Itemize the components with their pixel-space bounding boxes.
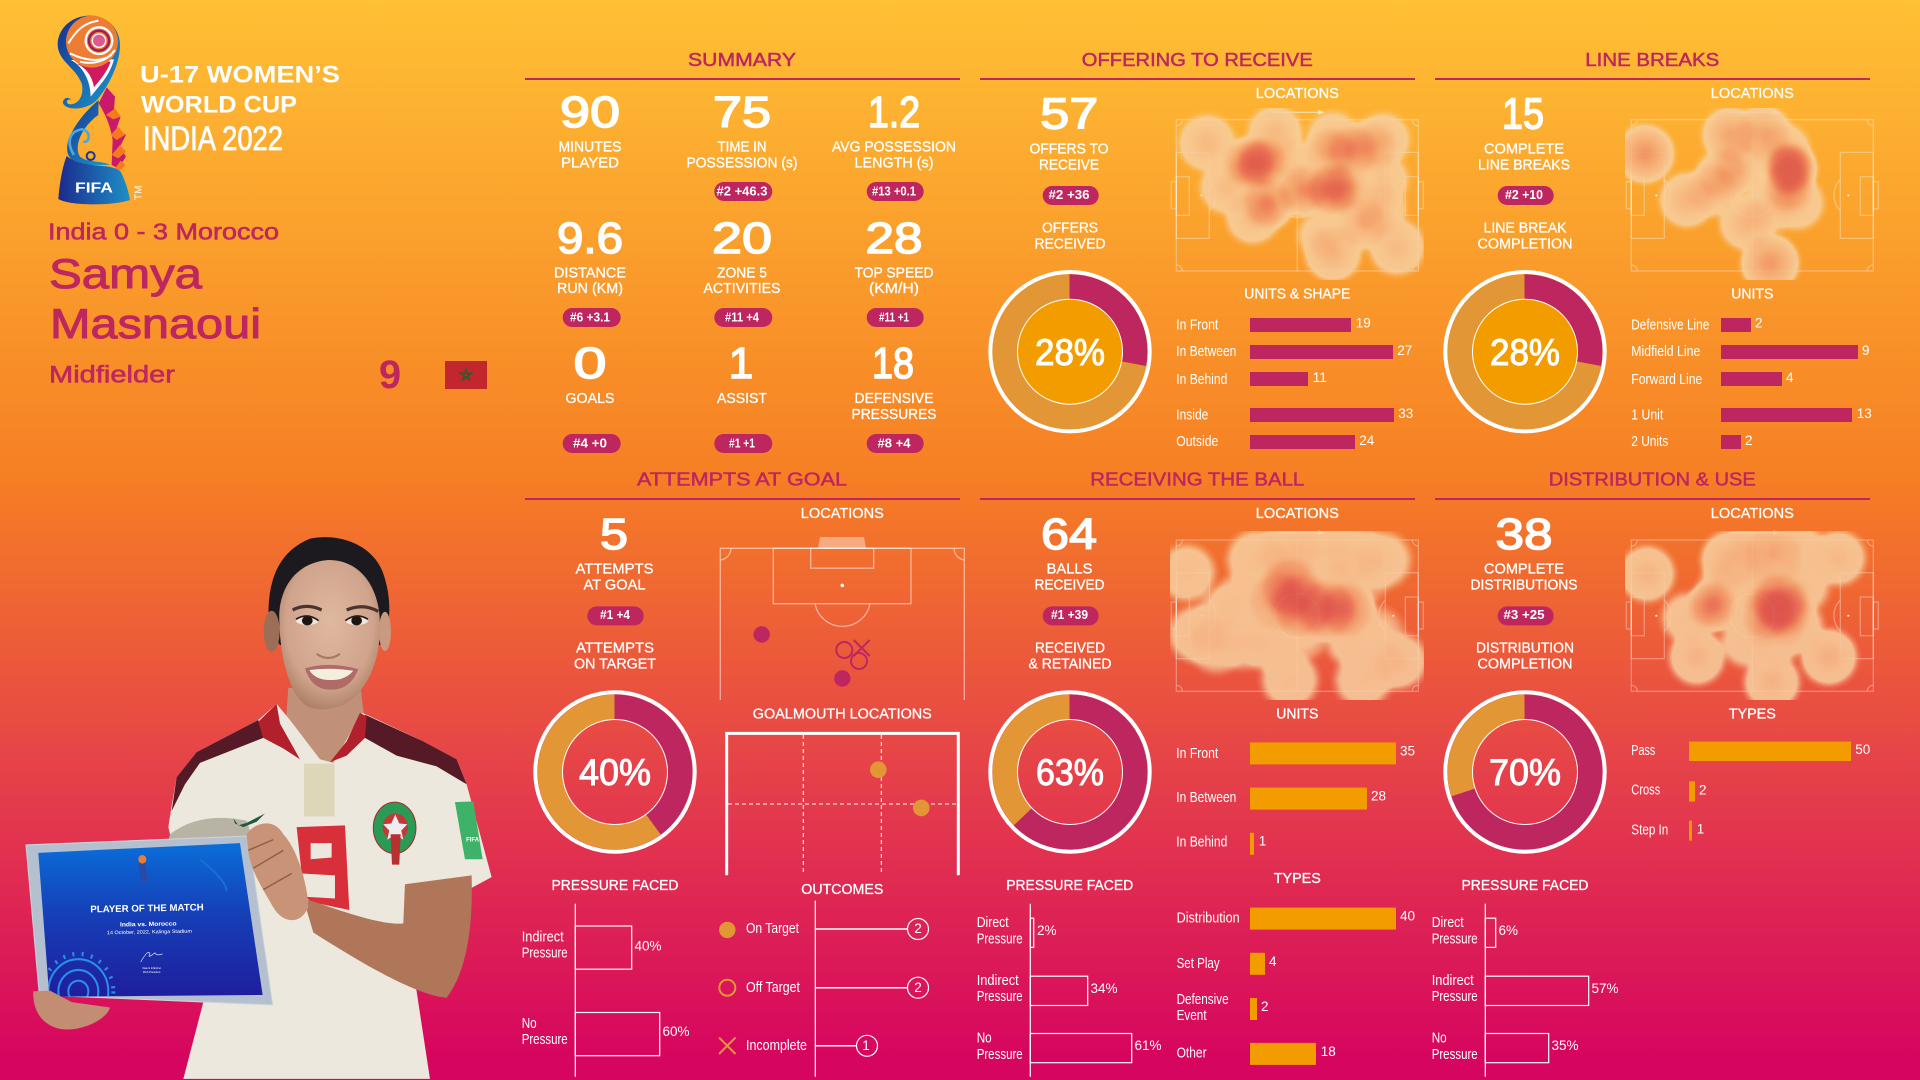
bar chart: distribution types: Pass [1631, 743, 1655, 759]
bar chart: units and shape: 11 [1313, 370, 1327, 385]
bar chart: receiving types: 2 [1261, 999, 1269, 1014]
bar chart: pressure faced: Pressure [1432, 1047, 1478, 1063]
stat: time in possession [686, 88, 798, 201]
tournament logo: FIFA [75, 180, 113, 196]
bar chart: units and shape: Inside [1176, 407, 1208, 423]
stat: assist [714, 339, 772, 453]
stat: balls received: RECEIVED [1034, 577, 1104, 593]
bar chart: pressure faced: 2% [1037, 923, 1057, 938]
bar chart: distribution types: 2 [1699, 782, 1707, 797]
heading: attempts at goal: ATTEMPTS AT GOAL [637, 469, 847, 490]
tournament title: WORLD CUP [141, 92, 297, 119]
stat: goals: 0 [574, 339, 606, 388]
bar chart: units: 2 Units [1631, 434, 1668, 450]
bar chart: units and shape: 19 [1356, 316, 1371, 331]
stat: balls received [1034, 510, 1104, 625]
donut chart: line break completion 28% [1445, 272, 1605, 431]
bar chart: units and shape: 33 [1398, 406, 1413, 421]
stat: average possession length [832, 88, 956, 201]
stat: attempts at goal: #1 +4 [600, 607, 631, 622]
donut label: offers received: OFFERS [1042, 220, 1098, 236]
stat: attempts at goal: ATTEMPTS [576, 562, 654, 578]
player illustration: 14 October, 2022, Kalinga Stadium [107, 929, 192, 936]
donut chart: attempts on target 40%: 40% [579, 752, 651, 793]
player illustration: India vs. Morocco [120, 921, 177, 929]
stat: zone 5 activities [704, 214, 780, 327]
bar chart: receiving types: 4 [1269, 954, 1277, 969]
donut label: line break completion [1478, 220, 1572, 252]
stat: assist: ASSIST [717, 391, 767, 407]
donut chart: line break completion 28%: 28% [1490, 332, 1560, 373]
heading: types: TYPES [1729, 707, 1776, 723]
stat: complete distributions: 38 [1496, 510, 1552, 559]
donut chart: distribution completion 70%: 70% [1489, 752, 1561, 793]
heading: line breaks: LINE BREAKS [1585, 49, 1719, 70]
bar chart: units: 2 [1755, 316, 1763, 331]
stat: defensive pressures [852, 339, 936, 453]
panel: summary [525, 49, 960, 453]
donut chart: received and retained 63%: 63% [1036, 752, 1104, 793]
outcome: incomplete: 1 [862, 1038, 870, 1053]
certificate [26, 836, 273, 1005]
bar chart: pressure faced: No [977, 1030, 992, 1046]
bar chart: units and shape: In Front [1176, 317, 1218, 333]
stat: offers to receive: RECEIVE [1039, 157, 1099, 173]
heading: summary: SUMMARY [688, 49, 796, 70]
stat: zone 5 activities: ZONE 5 [717, 266, 767, 282]
bar chart: receiving units: In Front [1176, 746, 1218, 762]
stat: goals: #4 +0 [573, 436, 607, 451]
bar chart: pressure faced: Indirect [977, 973, 1019, 989]
stat: time in possession: POSSESSION (s) [686, 156, 798, 172]
donut label: line break completion: COMPLETION [1478, 236, 1572, 252]
panel: line breaks [1435, 49, 1878, 450]
bar chart: units and shape: 24 [1359, 433, 1375, 448]
bar chart: pressure faced: 35% [1552, 1038, 1579, 1053]
bar chart: units [1631, 316, 1872, 450]
stat: minutes played: 90 [560, 88, 620, 137]
stat: top speed: #11 +1 [879, 310, 909, 325]
bar chart: pressure faced: Pressure [522, 1032, 568, 1048]
stat: distance run: #6 +3.1 [570, 310, 610, 325]
stat: attempts at goal [576, 510, 654, 625]
heading: locations: LOCATIONS [1256, 506, 1339, 522]
stat: minutes played [558, 88, 622, 172]
heatmap: receiving locations [1170, 530, 1424, 700]
panel: receiving the ball [977, 469, 1427, 1077]
heatmap: line break locations [1618, 107, 1878, 290]
stat: complete distributions: COMPLETE [1484, 562, 1564, 578]
bar chart: distribution types: 50 [1855, 742, 1870, 757]
tournament title: U-17 WOMEN’S [140, 62, 340, 89]
heading: pressure faced: PRESSURE FACED [552, 878, 678, 894]
sleeve patch [455, 801, 483, 859]
player first name: Samya [49, 250, 203, 297]
tournament title: INDIA 2022 [143, 120, 283, 158]
outcome: off target: Off Target [746, 980, 800, 996]
attempt markers [754, 626, 870, 687]
heading: locations: LOCATIONS [1711, 86, 1794, 102]
stat: attempts at goal: 5 [600, 510, 628, 559]
outcome: incomplete [719, 1035, 878, 1056]
heatmap: offering locations [1171, 107, 1424, 280]
donut chart: distribution completion 70% [1445, 692, 1605, 852]
heading: locations: LOCATIONS [1711, 506, 1794, 522]
stat: time in possession: 75 [713, 88, 771, 137]
bar chart: receiving units: 28 [1371, 789, 1386, 804]
bar chart: receiving units: In Behind [1176, 835, 1227, 851]
bar chart: pressure faced: Pressure [522, 946, 568, 962]
stat: minutes played: PLAYED [561, 156, 619, 172]
stat: goals [563, 339, 621, 453]
donut label: received and retained: & RETAINED [1028, 656, 1112, 672]
player illustration: FIFA [466, 836, 480, 843]
bar chart: pressure faced: Pressure [1432, 989, 1478, 1005]
bar chart: pressure faced: 34% [1090, 981, 1118, 996]
shirt number: 9 [379, 353, 401, 397]
stat: complete distributions: DISTRIBUTIONS [1470, 577, 1578, 593]
heading: offering to receive: OFFERING TO RECEIVE [1082, 49, 1313, 70]
donut chart: offers received 28% [990, 272, 1150, 431]
stat: distance run: 9.6 [557, 214, 623, 263]
bar chart: receiving units: 35 [1400, 743, 1415, 758]
stat: balls received: 64 [1041, 510, 1097, 559]
heading: units: UNITS [1731, 286, 1773, 302]
donut label: distribution completion: COMPLETION [1478, 656, 1572, 672]
heading: locations: LOCATIONS [801, 506, 884, 522]
stat: time in possession: #2 +46.3 [716, 184, 768, 199]
bar chart: receiving units [1176, 742, 1415, 855]
bar chart: distribution types [1631, 742, 1870, 841]
bar chart: pressure faced: Direct [977, 915, 1009, 931]
bar chart: units: Midfield Line [1631, 344, 1700, 360]
bar chart: units: Defensive Line [1631, 317, 1709, 333]
stat: average possession length: AVG POSSESSION [832, 140, 956, 156]
stat: distance run: RUN (KM) [557, 281, 623, 297]
heading: distribution and use: DISTRIBUTION & USE [1549, 469, 1756, 490]
stat: complete line breaks: COMPLETE [1484, 141, 1564, 157]
donut label: attempts on target: ON TARGET [574, 656, 656, 672]
bar chart: units: 2 [1745, 433, 1753, 448]
bar chart: pressure faced: No [1432, 1030, 1447, 1046]
stat: average possession length: #13 +0.1 [872, 184, 916, 199]
bar chart: pressure faced: No [522, 1016, 537, 1032]
stat: offers to receive: 57 [1040, 89, 1098, 138]
goalmouth chart [727, 733, 958, 875]
player details [48, 218, 401, 397]
outcome: off target [719, 977, 928, 998]
bar chart: units: Forward Line [1631, 372, 1702, 388]
heading: receiving the ball: RECEIVING THE BALL [1090, 469, 1304, 490]
donut label: attempts on target [574, 640, 656, 672]
donut chart: attempts on target 40% [535, 692, 695, 852]
donut label: attempts on target: ATTEMPTS [576, 640, 654, 656]
donut chart: received and retained 63% [990, 692, 1150, 852]
bar chart: units and shape: In Behind [1176, 372, 1227, 388]
tournament logo [58, 16, 145, 204]
position: Midfielder [49, 362, 175, 389]
outcome: off target: 2 [914, 980, 922, 995]
heading: pressure faced: PRESSURE FACED [1006, 878, 1133, 894]
outcome: on target [719, 918, 928, 940]
bar chart: receiving types: Distribution [1177, 911, 1240, 927]
stat: balls received: BALLS [1046, 562, 1092, 578]
bar chart: units and shape: 27 [1397, 343, 1412, 358]
player illustration: Gianni Infantino [142, 966, 161, 970]
icon: Morocco flag [445, 361, 487, 389]
bar chart: pressure faced: Pressure [977, 989, 1023, 1005]
bar chart: receiving units: In Between [1176, 790, 1236, 806]
bar chart: receiving types: Set Play [1177, 956, 1220, 972]
player illustration: FIFA President [143, 970, 161, 974]
stat: distance run: DISTANCE [554, 266, 626, 282]
bar chart: pressure faced: Direct [1432, 915, 1464, 931]
player illustration [26, 537, 492, 1079]
bar chart: pressure faced: 40% [634, 938, 662, 954]
bar chart: receiving units: 1 [1259, 834, 1266, 848]
outcome: on target: On Target [746, 921, 799, 937]
bar chart: pressure faced: 6% [1498, 923, 1518, 938]
stat: complete distributions [1470, 510, 1578, 625]
tournament logo: TM [134, 186, 145, 200]
bar chart: distribution types: Step In [1631, 822, 1668, 838]
stat: minutes played: MINUTES [558, 140, 622, 156]
donut chart: offers received 28%: 28% [1035, 332, 1105, 373]
stat: complete line breaks [1478, 89, 1570, 205]
bar chart: receiving types: Event [1177, 1008, 1207, 1024]
stat: top speed [854, 214, 934, 327]
stat: offers to receive: OFFERS TO [1030, 141, 1108, 157]
bar chart: pressure faced: Pressure [977, 1047, 1023, 1063]
stat: average possession length: 1.2 [868, 88, 920, 137]
jersey [168, 704, 492, 1079]
bar chart: receiving types: Defensive [1177, 992, 1229, 1008]
bar chart: units and shape [1176, 316, 1413, 450]
donut label: received and retained: RECEIVED [1035, 640, 1105, 656]
stat: complete distributions: #3 +25 [1504, 607, 1544, 622]
stat: zone 5 activities: ACTIVITIES [704, 281, 780, 297]
stat: zone 5 activities: 20 [712, 214, 772, 263]
bar chart: pressure faced: Indirect [1432, 973, 1474, 989]
heading: outcomes: OUTCOMES [801, 882, 883, 898]
panel: distribution and use [1432, 469, 1878, 1077]
bar chart: pressure faced: Pressure [977, 932, 1023, 948]
chart: outcomes [719, 901, 928, 1077]
hands [247, 823, 308, 920]
panel: attempts at goal [522, 469, 964, 1077]
bar chart: pressure faced [522, 904, 690, 1077]
bar chart: distribution types: 1 [1697, 822, 1704, 837]
stat: zone 5 activities: #11 +4 [725, 310, 760, 325]
bar chart: pressure faced [977, 904, 1162, 1077]
arm [303, 875, 472, 998]
player illustration: PLAYER OF THE MATCH [90, 902, 204, 915]
bar chart: distribution types: Cross [1631, 783, 1660, 799]
stat: average possession length: LENGTH (s) [854, 156, 934, 172]
stat: balls received: #1 +39 [1051, 607, 1088, 622]
stat: complete line breaks: #2 +10 [1505, 187, 1543, 202]
stat: goals: GOALS [566, 391, 614, 407]
stat: offers to receive [1030, 89, 1108, 205]
stat: attempts at goal: AT GOAL [584, 577, 646, 593]
stat: assist: 1 [729, 339, 753, 388]
half pitch: attempt locations [720, 537, 964, 700]
bar chart: receiving types: 18 [1321, 1044, 1336, 1059]
bar chart: pressure faced: 61% [1134, 1038, 1162, 1053]
heading: units: UNITS [1276, 707, 1318, 723]
bar chart: units: 4 [1786, 370, 1794, 385]
crest [373, 802, 416, 854]
stat: top speed: (KM/H) [869, 281, 919, 297]
stat: defensive pressures: 18 [872, 339, 914, 388]
heading: units and shape: UNITS & SHAPE [1244, 286, 1351, 302]
bar chart: pressure faced: 60% [662, 1024, 690, 1039]
stat: complete line breaks: 15 [1502, 89, 1544, 138]
stat: complete line breaks: LINE BREAKS [1478, 157, 1570, 173]
stat: assist: #1 +1 [729, 436, 755, 451]
stat: distance run [554, 214, 626, 327]
stat: top speed: 28 [866, 214, 922, 263]
face [279, 560, 380, 709]
heading: types: TYPES [1274, 871, 1321, 887]
bar chart: units and shape: In Between [1176, 344, 1236, 360]
bar chart: pressure faced: Indirect [522, 930, 564, 946]
donut label: offers received [1034, 220, 1106, 252]
player surname: Masnaoui [50, 300, 261, 347]
bar chart: units: 13 [1857, 406, 1872, 421]
stat: defensive pressures: PRESSURES [852, 407, 936, 423]
outcome: on target: 2 [914, 921, 922, 936]
donut label: offers received: RECEIVED [1034, 236, 1106, 252]
heading: goalmouth locations: GOALMOUTH LOCATIONS [753, 707, 932, 723]
bar chart: receiving types: 40 [1400, 909, 1415, 924]
bar chart: receiving types: Other [1177, 1046, 1207, 1062]
stat: offers to receive: #2 +36 [1048, 187, 1090, 202]
panel: offering to receive [980, 49, 1424, 450]
bar chart: pressure faced [1432, 904, 1619, 1077]
bar chart: pressure faced: 57% [1592, 981, 1619, 996]
heatmap: distribution locations [1625, 530, 1879, 700]
outcome: incomplete: Incomplete [746, 1038, 807, 1054]
stat: top speed: TOP SPEED [854, 266, 934, 282]
bar chart: units: 9 [1862, 343, 1870, 358]
bar chart: receiving types [1177, 908, 1415, 1065]
bar chart: pressure faced: Pressure [1432, 932, 1478, 948]
bar chart: units and shape: Outside [1176, 434, 1218, 450]
bar chart: units: 1 Unit [1631, 407, 1663, 423]
donut label: line break completion: LINE BREAK [1484, 220, 1567, 236]
heading: locations: LOCATIONS [1256, 86, 1339, 102]
tournament title [140, 62, 340, 158]
stat: time in possession: TIME IN [718, 140, 766, 156]
donut label: distribution completion: DISTRIBUTION [1476, 640, 1574, 656]
donut label: distribution completion [1476, 640, 1574, 672]
match score: India 0 - 3 Morocco [48, 218, 279, 244]
heading: pressure faced: PRESSURE FACED [1462, 878, 1588, 894]
stat: defensive pressures: #8 +4 [878, 436, 911, 451]
donut label: received and retained [1028, 640, 1112, 672]
stat: defensive pressures: DEFENSIVE [854, 391, 934, 407]
